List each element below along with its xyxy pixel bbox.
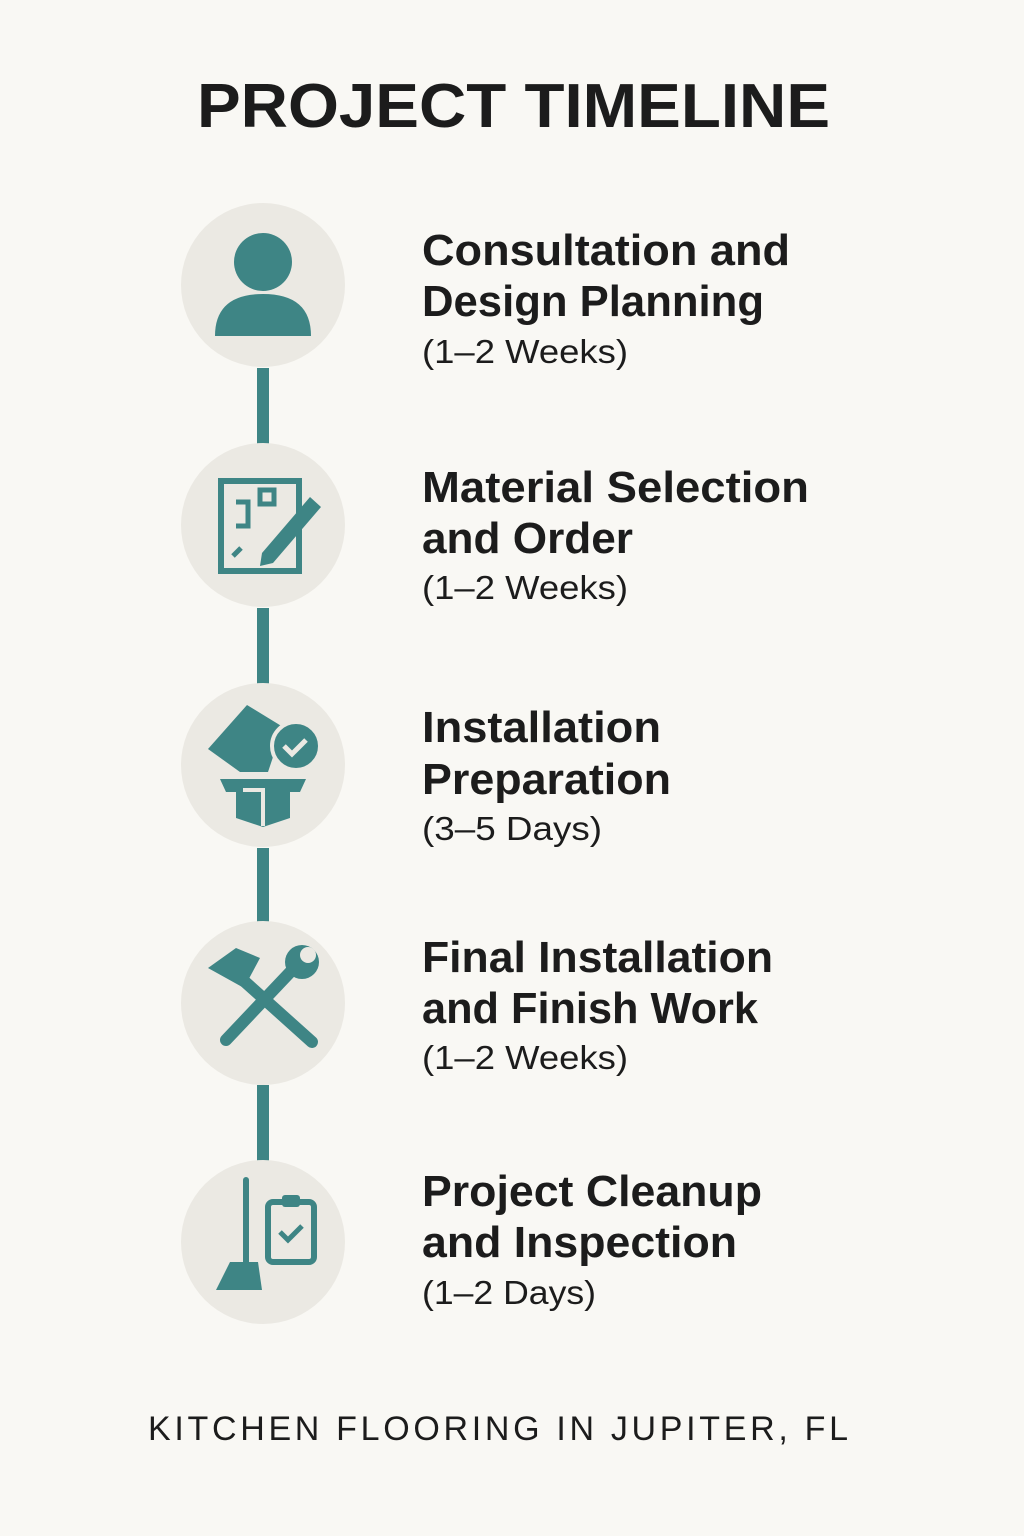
text: final: and Finish Work <box>422 984 759 1033</box>
step 3: preparation <box>181 683 671 847</box>
icon: tiles and box <box>181 683 345 847</box>
text: cleanup: (1–2 Days) <box>422 1274 596 1311</box>
text: preparation: (3–5 Days) <box>422 810 602 847</box>
text: final: Final Installation <box>422 933 773 982</box>
step 2: material <box>181 443 809 607</box>
icon: plan and pencil <box>181 443 345 607</box>
icon: broom and clipboard <box>181 1160 345 1324</box>
text: preparation: Installation <box>422 703 661 752</box>
text: consultation: Design Planning <box>422 277 764 326</box>
step 4: final installation <box>181 921 773 1085</box>
icon: person <box>181 203 345 367</box>
icon: hammer and wrench <box>181 921 345 1085</box>
text: consultation: Consultation and <box>422 226 790 275</box>
text: preparation: Preparation <box>422 755 671 804</box>
text: final: (1–2 Weeks) <box>422 1039 628 1076</box>
footer: KITCHEN FLOORING IN JUPITER, FL <box>148 1410 848 1448</box>
title: PROJECT TIMELINE <box>197 72 830 141</box>
text: final <box>422 933 773 1076</box>
timeline connectors <box>257 368 269 1161</box>
text: consultation <box>422 226 790 370</box>
text: consultation: (1–2 Weeks) <box>422 333 628 370</box>
step 5: cleanup <box>181 1160 762 1324</box>
text: cleanup: and Inspection <box>422 1218 737 1267</box>
text: material: (1–2 Weeks) <box>422 569 628 606</box>
text: preparation <box>422 703 671 847</box>
text: material: and Order <box>422 514 633 563</box>
text: material: Material Selection <box>422 463 809 512</box>
text: material <box>422 463 809 606</box>
step 1: consultation <box>181 203 790 370</box>
text: cleanup: Project Cleanup <box>422 1167 762 1216</box>
text: cleanup <box>422 1167 762 1311</box>
